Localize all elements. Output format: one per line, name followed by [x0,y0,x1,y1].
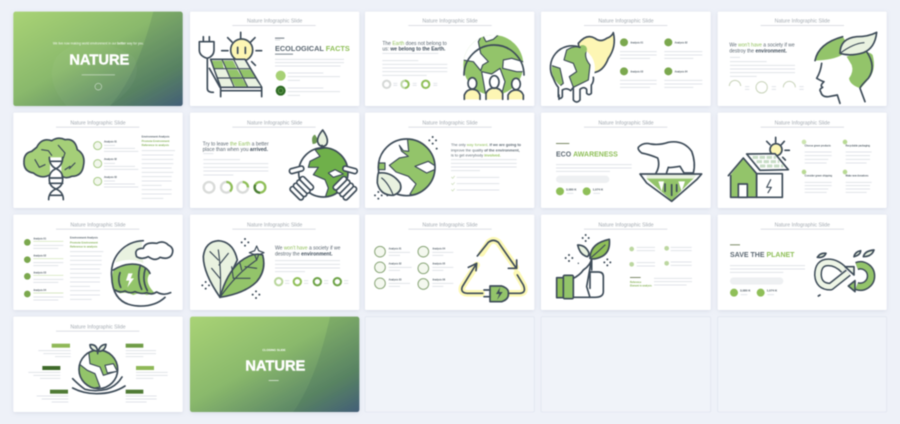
tip: recyclable packaging [843,140,872,163]
tip: make new donations [843,170,872,192]
item: analysis 02: Analysis 02 [33,255,47,258]
body text [275,261,340,272]
slide 16: globe in hands with labels: Nature Infographic Slide [70,324,126,330]
body text [382,53,447,75]
slide 15: save the planet [718,215,887,310]
body text [730,266,805,272]
item: analysis 02: Analysis 02 [104,158,118,161]
items: six analysis circles: Analysis 02 [389,263,402,266]
item: analysis 03: Analysis 03 [630,70,644,73]
column: environment analysis: Reference to analysis [142,143,170,147]
tagline: We live now making world environment in our better way for you. [53,41,144,45]
item: analysis 03: Analysis 03 [104,176,118,179]
body text [275,59,344,66]
heading line 2: destroy the environment. [275,252,333,258]
column: environment analysis [142,134,175,198]
item: analysis 04 [664,67,702,87]
icon: globe with leaf [374,136,440,200]
stat 2: 1,074 K [767,289,778,293]
slide 9: eco awareness [541,113,711,208]
text block: Element to analysis [630,284,652,287]
empty slide placeholders [365,317,887,412]
column: environment analysis: Environment Analysis [70,236,98,240]
tip: choose green products [802,140,832,163]
stat 1 [556,187,577,195]
slide 4: melting earth: Nature Infographic Slide [598,19,654,25]
item: analysis 02 [24,255,63,266]
slide 8: way forward globe: Nature Infographic Slide [422,120,478,126]
item: analysis 01 [620,38,657,58]
item: analysis 02 [664,38,702,58]
items: six analysis circles: Analysis 04 [432,248,446,251]
heading: Try to leave the Earth a better [203,141,269,147]
slide 12: leaf heart: Nature Infographic Slide [247,222,302,228]
label: right top [126,344,156,357]
item: analysis 01: Analysis 01 [104,140,118,143]
body text [451,160,517,171]
slide 1: cover [13,12,183,106]
eyebrow [556,143,569,144]
item: analysis 03: Analysis 03 [33,271,47,274]
icon: hands holding globe with sprout [289,130,358,201]
item: analysis 01: Analysis 01 [630,41,644,44]
slide 15: save the planet: Nature Infographic Slide [775,222,830,228]
body text [730,57,795,76]
pill callout [556,176,609,183]
column: environment analysis [70,236,103,299]
stat 1: 3,080 K [566,187,577,191]
cover subline [82,74,115,75]
slide 17: closing slide [190,317,359,412]
icon: wave with lightning bolt [111,241,173,306]
slide 6: tree and dna [13,113,183,208]
eyebrow [730,244,740,245]
heading: We won't have a society if we [275,246,341,252]
eyebrow: CLOSING SLIDE [262,348,286,352]
item: analysis 04: Analysis 04 [675,70,688,73]
heading line 2: destroy the environment. [729,49,787,55]
icon: solar panel with plug and sun [199,32,262,97]
icon: house with solar roof and sun [728,137,789,197]
icon: polar bear on ice [638,142,702,201]
column: environment analysis: Environment Analysis [142,134,170,138]
checklist [451,176,499,191]
play button icon [95,83,102,90]
icon: infinity recycling with leaves [817,250,874,296]
item: analysis 02: Analysis 02 [675,41,688,44]
slide 9: eco awareness: Nature Infographic Slide [598,120,654,126]
label: right middle [136,366,168,378]
heading: The only way forward, if we are going to [451,143,522,147]
icon: recycle triangle with plug [462,240,524,302]
tip: choose green products: Choose green products [805,145,832,148]
column: environment analysis: Promote Environment [70,240,98,244]
label: right bottom [126,390,157,402]
heading line 3: is to get everybody involved. [451,154,501,158]
icon: globe with people [458,33,528,100]
slide 10: green house tips: Nature Infographic Slide [775,120,830,126]
stat 2 [757,289,778,297]
label: left bottom [37,390,68,402]
column: environment analysis: Reference to analysis [70,244,98,248]
heading: save the planet: SAVE THE PLANET [730,252,795,259]
heading: We won't have a society if we [729,43,795,49]
item: analysis 03 [24,271,63,282]
slide 4: melting earth [541,12,711,106]
heading: ecological facts [275,38,350,55]
donut charts [204,182,265,193]
slide 16: globe in hands with labels [13,317,183,412]
items: six analysis circles: Analysis 03 [389,279,402,282]
stat 2 [583,187,604,195]
body text [203,154,268,175]
cover title: NATURE [69,52,130,68]
pill callout [730,277,783,285]
heading: eco awareness: ECO AWARENESS [556,151,618,158]
stat 1: 3,080 K [740,289,751,293]
slide 3: earth belonging [365,12,534,106]
donut charts [383,81,437,88]
slide 14: thumbs up sprout [541,215,711,310]
heading: The Earth does not belong to [382,41,447,47]
icon: thumb with sprout [557,234,611,299]
closing title: NATURE [245,358,306,374]
tip: recyclable packaging: Recyclable packaging [846,146,871,148]
stat 2: 1,074 K [593,187,604,191]
slide 2: ecological facts [190,12,359,106]
tip: consider green shipping [802,170,833,192]
icon: dna tree [24,138,84,200]
text block: Reference [630,282,642,284]
slide 7: leave the earth better [190,113,359,208]
subline [269,380,279,381]
slide 3: earth belonging: Nature Infographic Slide [422,19,478,25]
slide 14: thumbs up sprout: Nature Infographic Slide [598,222,654,228]
body text [556,165,632,171]
column: environment analysis: Promote Environment [142,139,170,143]
slide 7: leave the earth better: Nature Infographic Slide [247,120,302,126]
item: analysis 04 [24,289,63,300]
slide 5: society and environment head: Nature Infographic Slide [775,19,830,25]
icon row [629,246,692,267]
slide 5: society and environment head [718,12,887,106]
heading: ecological facts: ECOLOGICAL FACTS [275,44,350,53]
slide 6: tree and dna: Nature Infographic Slide [70,120,126,126]
stat: dark green [276,86,340,96]
item: analysis 01 [94,140,138,151]
heading line 2: improve the quality of the environment, [451,148,520,152]
heading line 2: us: we belong to the Earth. [382,47,446,53]
stat: light green [276,71,340,81]
item: analysis 01 [24,237,63,248]
icon: head with leaf [815,32,877,103]
item: analysis 02 [94,158,138,169]
progress gauges [729,80,804,93]
icon: globe in hands with sprout [73,344,125,394]
slide 10: green house tips [718,113,887,208]
slide 13: recycle plug [365,215,534,310]
slide 11: wave and energy: Nature Infographic Slide [70,222,126,228]
item: analysis 04: Analysis 04 [33,289,47,292]
items: six analysis circles [375,246,453,289]
slide 8: way forward globe [365,113,534,208]
slide 13: recycle plug: Nature Infographic Slide [422,222,478,228]
tip: make new donations: Make new donations [846,175,869,178]
label: left middle [28,366,60,378]
items: six analysis circles: Analysis 05 [432,263,446,266]
stat 1 [730,289,751,297]
slide 2: ecological facts: Nature Infographic Slide [247,19,302,25]
items: six analysis circles: Analysis 01 [389,248,402,251]
donut charts [275,278,348,285]
item: analysis 03 [620,67,657,87]
icon: heart of leaves [201,238,264,299]
label: left top [38,344,71,357]
heading line 2: place than when you arrived. [203,147,269,153]
item: analysis 01: Analysis 01 [33,237,47,240]
slide 12: leaf heart [190,215,359,310]
slide 11: wave and energy [13,215,183,310]
item: analysis 03 [94,176,138,187]
text block [630,277,692,287]
tip: consider green shipping: Consider green shipping [805,176,833,178]
items: six analysis circles: Analysis 06 [432,279,446,282]
icon: melting globe with flame [550,33,614,102]
